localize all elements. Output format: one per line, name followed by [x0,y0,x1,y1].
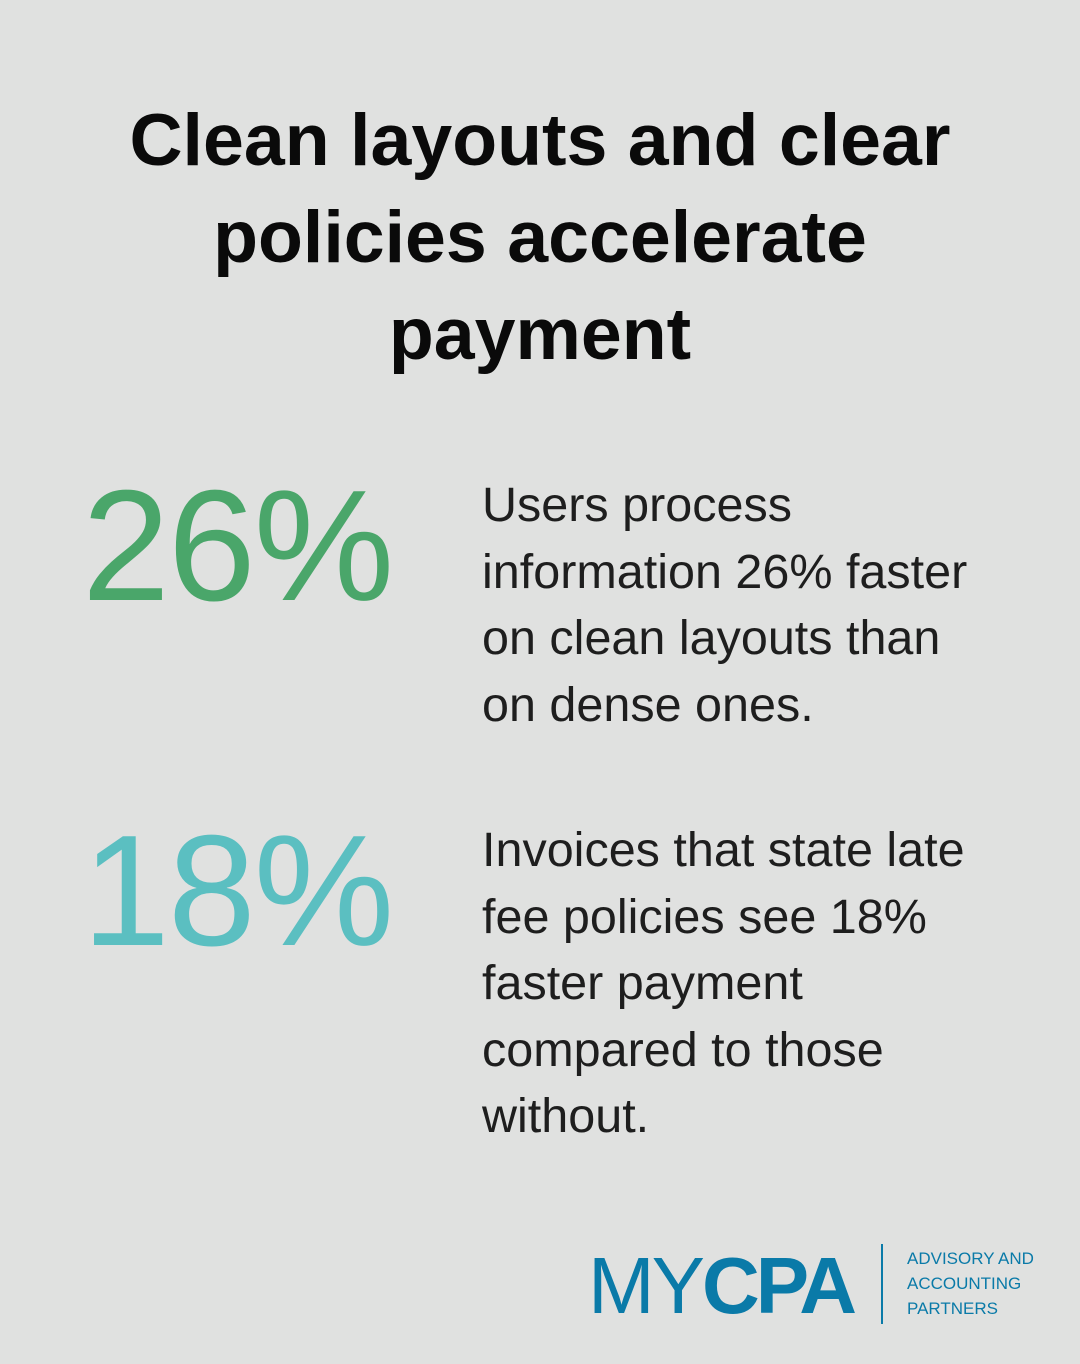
title: policies accelerate [213,195,867,278]
logo: MYCPA [588,1241,1034,1330]
title [129,98,951,375]
logo wordmark: MYCPA [588,1241,853,1330]
logo tagline: ACCOUNTING [907,1274,1021,1293]
text: 18% description: Invoices that state late [482,823,965,877]
text: 26% description: on clean layouts than [482,611,940,665]
text: 26% description: information 26% faster [482,544,967,598]
text: 18% description: compared to those [482,1022,884,1076]
text: 18% description [482,823,965,1143]
text: 18% description: without. [482,1089,649,1143]
text: 26% description [482,478,967,732]
logo tagline [907,1249,1034,1318]
text: 18% description: fee policies see 18% [482,890,927,944]
logo tagline: PARTNERS [907,1299,998,1318]
logo tagline: ADVISORY AND [907,1249,1034,1268]
title: Clean layouts and clear [129,98,951,181]
stat: 18%: 18% [82,803,392,979]
text: 18% description: faster payment [482,956,803,1010]
text: 26% description: Users process [482,478,792,532]
text: 26% description: on dense ones. [482,678,814,732]
stat: 26%: 26% [82,458,392,634]
title: payment [389,292,691,375]
